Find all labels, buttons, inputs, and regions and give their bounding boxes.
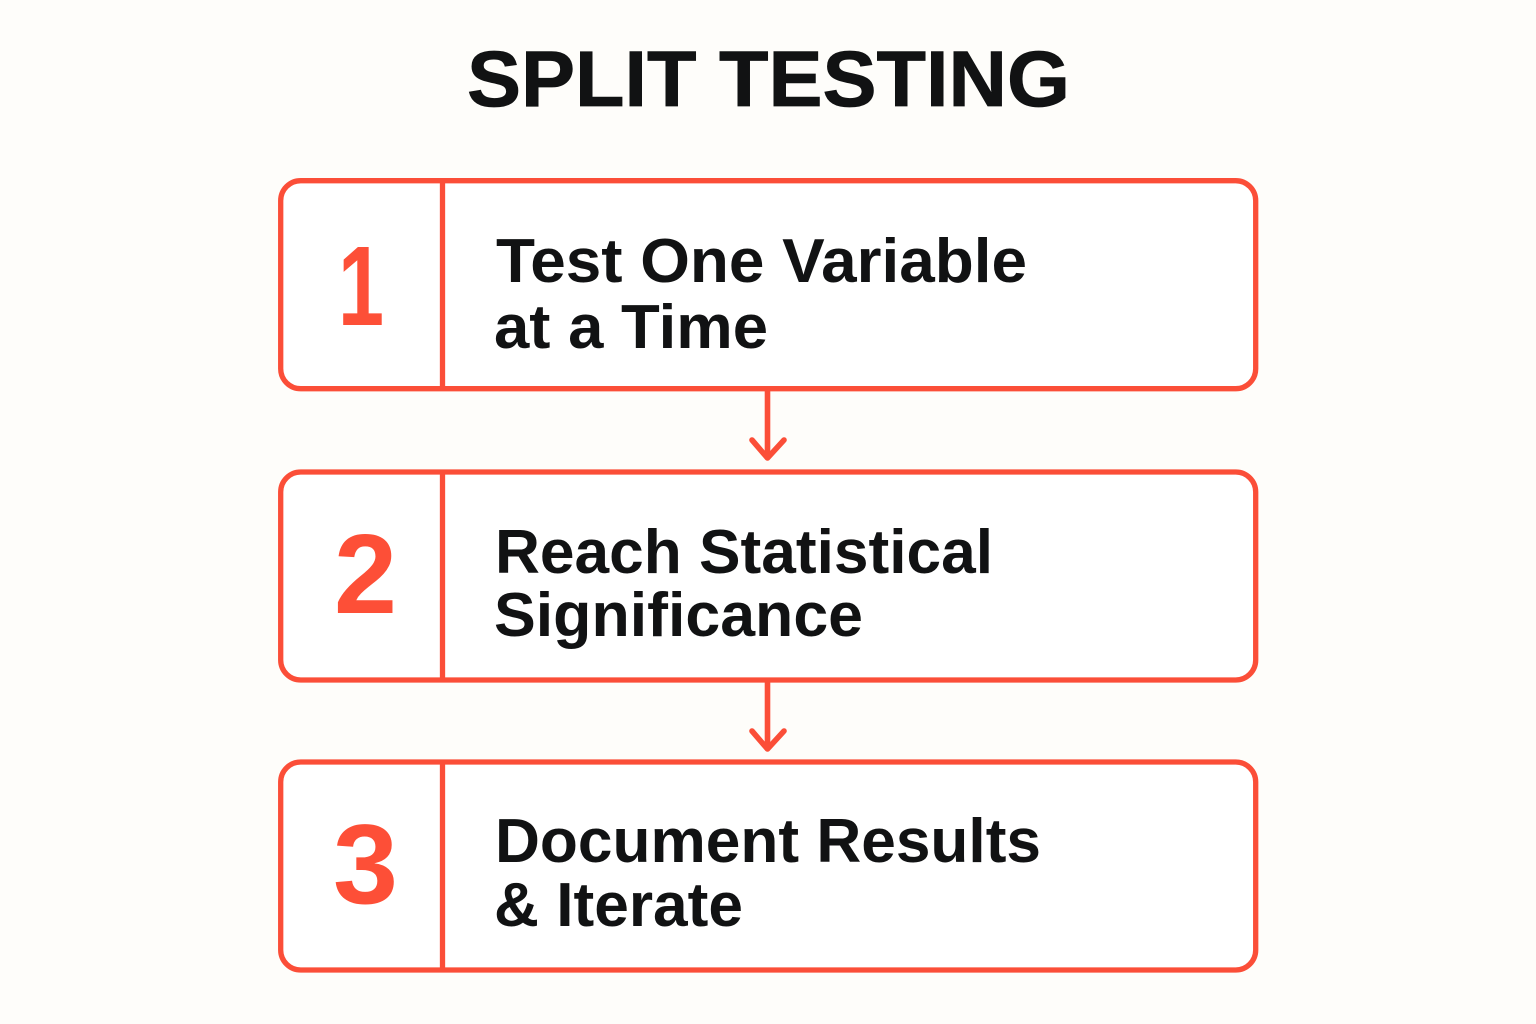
step 1 divider [440, 181, 445, 388]
step 3 number: 3 [333, 801, 398, 927]
step 1 number: 1 [338, 223, 384, 349]
panel: step 1 [281, 181, 1256, 389]
title: SPLIT TESTING [467, 34, 1070, 123]
step 1 text: at a Time [494, 293, 768, 362]
step 2 text: Significance [494, 581, 863, 650]
step 2 text: Reach Statistical [495, 518, 993, 587]
step 3 text: Document Results [495, 807, 1041, 876]
step 3 divider [440, 762, 445, 970]
step 2 box [281, 472, 1256, 680]
arrow: step 1 to step 2 [752, 390, 784, 458]
step 1 box [281, 181, 1256, 389]
arrow: step 2 to step 3 [752, 682, 784, 749]
step 1 text: Test One Variable [496, 227, 1027, 296]
panel: step 3 [281, 762, 1256, 970]
step 3 box [281, 762, 1256, 970]
step 2 number: 2 [334, 511, 397, 637]
panel: step 2 [281, 472, 1256, 680]
step 3 text: & Iterate [494, 871, 743, 940]
step 2 divider [440, 472, 445, 680]
